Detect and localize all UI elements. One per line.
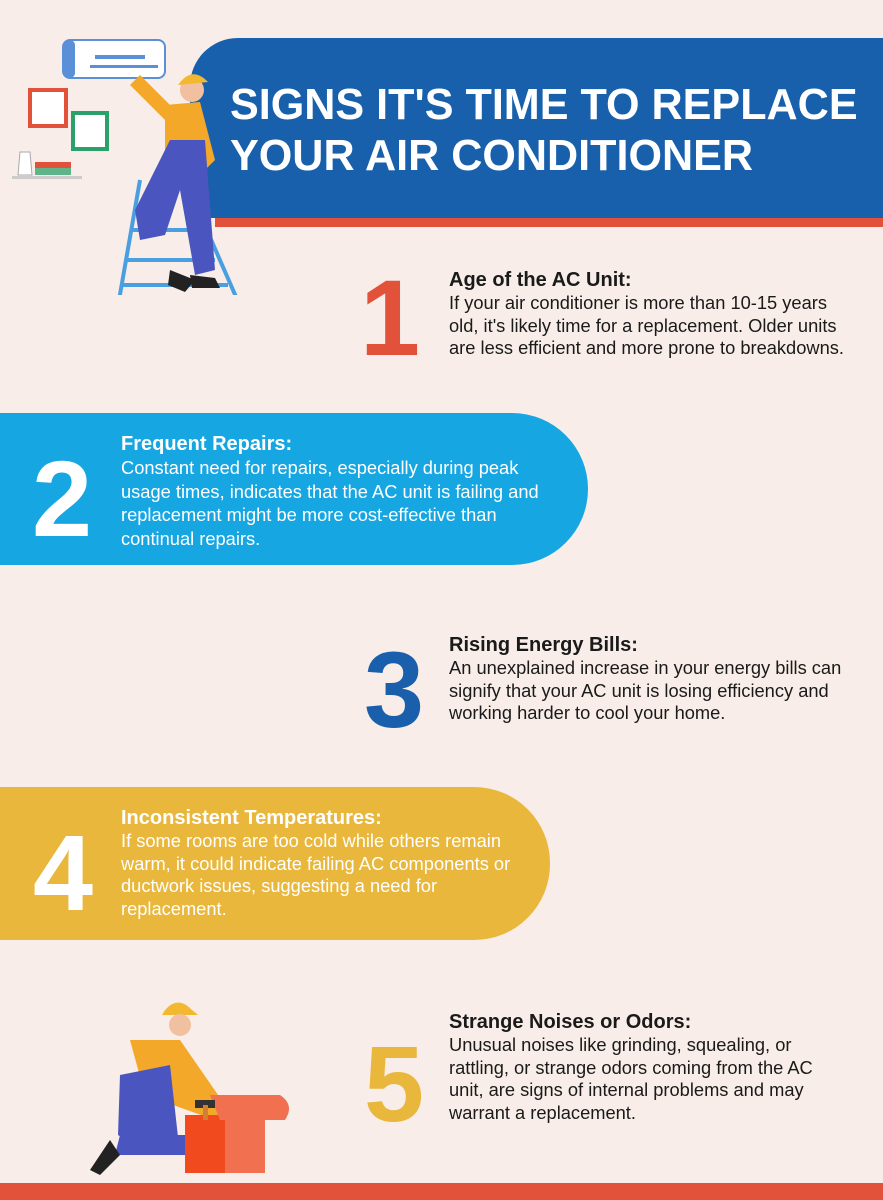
number 4: 4 bbox=[33, 812, 93, 933]
ladder bbox=[118, 180, 240, 306]
number 1: 1 bbox=[360, 257, 420, 378]
panel 2 bbox=[0, 413, 588, 565]
panel 4 bbox=[0, 787, 550, 940]
shelf bbox=[12, 176, 82, 179]
body bbox=[165, 102, 215, 180]
text 5: Unusual noises like grinding, squealing, or rattling, or strange odors coming from the AC unit, are signs of internal problems and may warrant a replacement. bbox=[449, 1034, 813, 1122]
item 5 bbox=[364, 1011, 813, 1144]
text 1: Age of the AC Unit: bbox=[449, 269, 632, 291]
title: SIGNS IT'S TIME TO REPLACE bbox=[230, 80, 858, 129]
number 5: 5 bbox=[364, 1023, 424, 1144]
frames bbox=[30, 90, 66, 126]
bottom stripe bbox=[0, 1183, 883, 1200]
header banner bbox=[190, 38, 883, 227]
text 4: Inconsistent Temperatures: bbox=[121, 807, 382, 829]
red stripe bbox=[215, 216, 883, 227]
text 2: Constant need for repairs, especially during peak usage times, indicates that the AC unit is failing and replacement might be more cost-effective than continual repairs. bbox=[121, 457, 539, 548]
number 2: 2 bbox=[32, 438, 92, 559]
number 3: 3 bbox=[364, 629, 424, 750]
text 3: Rising Energy Bills: bbox=[449, 634, 638, 656]
illustration: technician on ladder bbox=[12, 39, 238, 295]
text 4: If some rooms are too cold while others remain warm, it could indicate failing AC components or ductwork issues, suggesting a need for replacement. bbox=[121, 830, 510, 918]
item 1 bbox=[360, 257, 844, 378]
title: YOUR AIR CONDITIONER bbox=[230, 131, 753, 180]
item 3 bbox=[364, 629, 841, 750]
illustration: technician with toolbox bbox=[90, 1002, 289, 1175]
text 3: An unexplained increase in your energy bills can signify that your AC unit is losing efficiency and working harder to cool your home. bbox=[449, 657, 841, 723]
blue title panel bbox=[190, 38, 883, 218]
ac unit bbox=[63, 40, 165, 78]
text 1: If your air conditioner is more than 10-15 years old, it's likely time for a replacement. Older units are less efficient and more prone to breakdowns. bbox=[449, 292, 844, 358]
text 5: Strange Noises or Odors: bbox=[449, 1011, 691, 1033]
title bbox=[230, 80, 858, 180]
text 2: Frequent Repairs: bbox=[121, 433, 292, 455]
